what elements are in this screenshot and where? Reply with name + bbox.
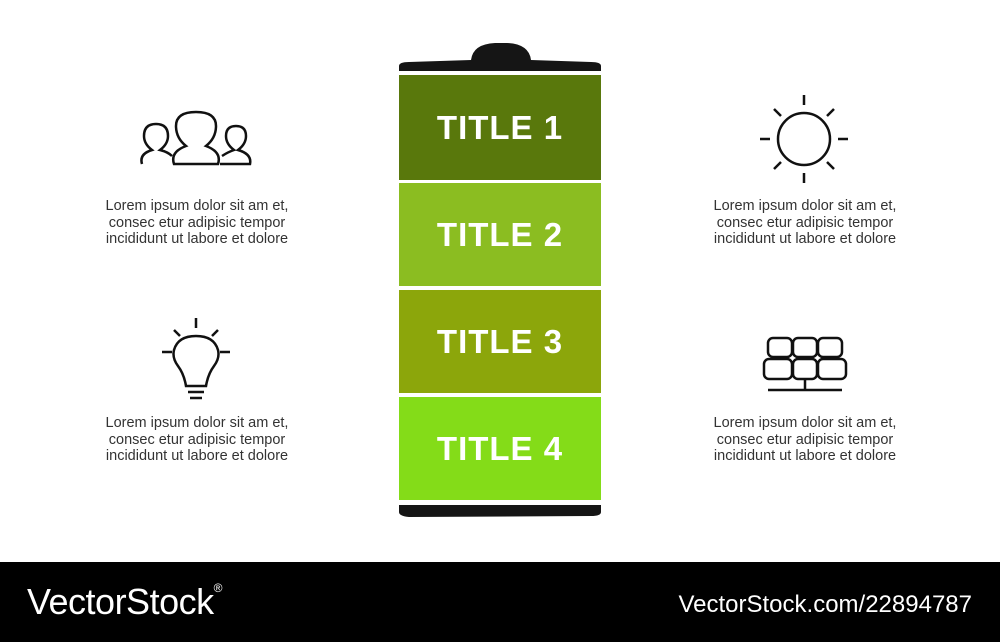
text: top left: consec etur adipisic tempor: [109, 214, 285, 230]
text: bottom left: Lorem ipsum dolor sit am et,: [106, 415, 288, 431]
text: top right: Lorem ipsum dolor sit am et,: [714, 198, 896, 214]
text: top right: incididunt ut labore et dolore: [714, 231, 896, 247]
icon: lightbulb: [162, 318, 230, 400]
segment: title 1: [399, 75, 601, 180]
icon: solar panel: [762, 336, 848, 392]
battery bottom: [399, 505, 601, 517]
text: bottom right: Lorem ipsum dolor sit am et,: [714, 415, 896, 431]
text: bottom left: consec etur adipisic tempor: [109, 432, 285, 448]
icon: sun: [760, 95, 848, 183]
icon: people: [140, 110, 252, 166]
segment: title 4: TITLE 4: [437, 430, 563, 466]
text: top left: Lorem ipsum dolor sit am et,: [106, 198, 288, 214]
segment: title 4: [399, 397, 601, 500]
text: top right: [714, 198, 896, 247]
text: top right: consec etur adipisic tempor: [717, 214, 893, 230]
battery: [399, 43, 601, 517]
footer logo: VectorStock®: [27, 581, 222, 622]
footer id: VectorStock.com/22894787: [678, 591, 972, 618]
text: bottom right: incididunt ut labore et dolore: [714, 448, 896, 464]
battery top cap: [399, 43, 601, 71]
segment: title 2: [399, 183, 601, 286]
text: bottom left: [106, 415, 288, 464]
segment: title 3: [399, 290, 601, 393]
text: bottom right: [714, 415, 896, 464]
segment: title 3: TITLE 3: [437, 322, 563, 360]
segment: title 1: TITLE 1: [437, 108, 563, 146]
text: top left: [106, 198, 288, 247]
footer bar: [0, 562, 1000, 642]
segment: title 2: TITLE 2: [437, 216, 563, 252]
text: bottom left: incididunt ut labore et dolore: [106, 448, 288, 464]
text: bottom right: consec etur adipisic tempor: [717, 432, 893, 448]
text: top left: incididunt ut labore et dolore: [106, 231, 288, 247]
